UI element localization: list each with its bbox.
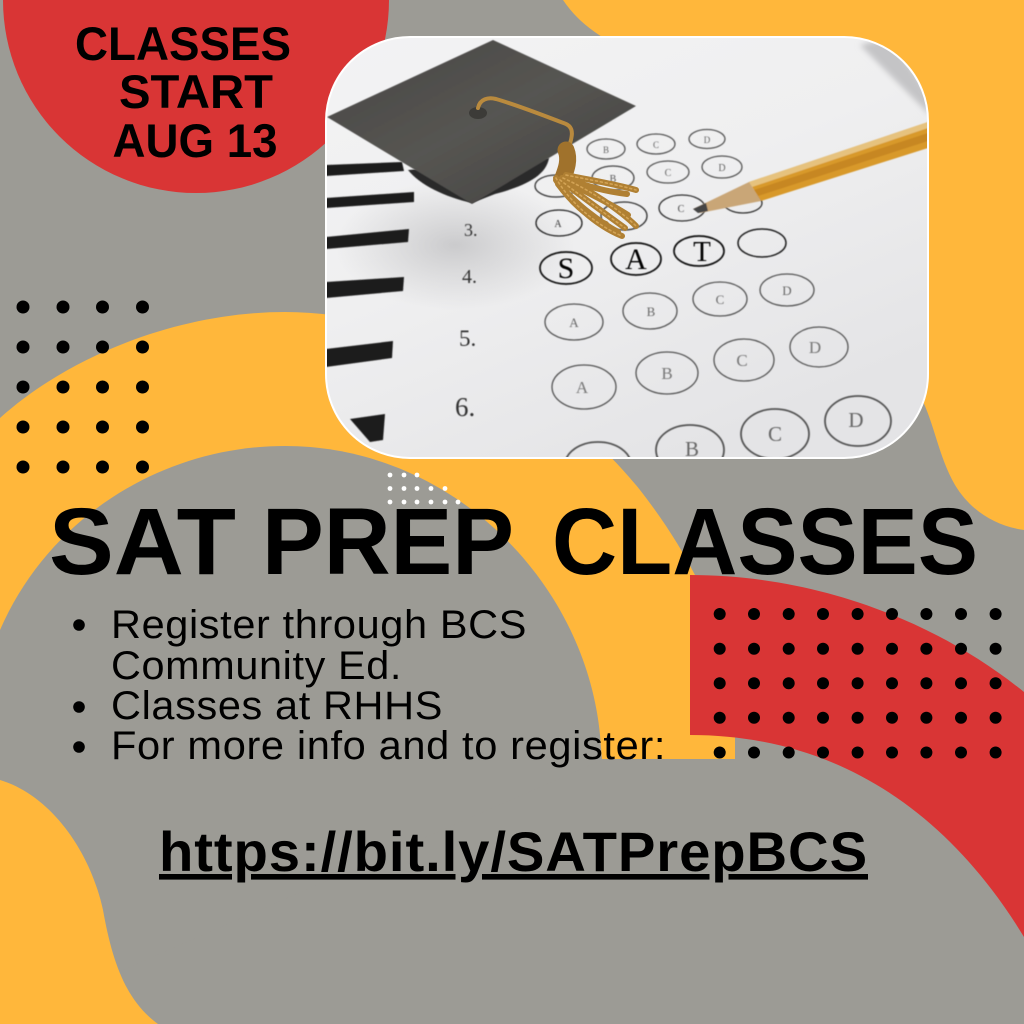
bubble letters: T: [693, 236, 711, 268]
timing bars: [326, 162, 414, 442]
badge text: AUG 13: [112, 114, 278, 167]
bubble letters: C: [768, 422, 782, 446]
bubble letters: A: [569, 315, 579, 330]
dot grid: right black dots: [714, 608, 1002, 758]
pencil: [693, 122, 928, 213]
background shape: red arc: [690, 575, 1024, 937]
bullet list: Community Ed.: [111, 644, 402, 688]
bubble letters: D: [704, 135, 711, 145]
bubble letters: A: [625, 243, 647, 276]
cap shadow on paper: [364, 196, 546, 294]
bullet list: [73, 603, 666, 768]
bubble letters: B: [603, 145, 609, 155]
bubble letters: C: [678, 204, 685, 215]
bubble letters: D: [782, 283, 792, 298]
background shape: central yellow wave: [0, 312, 735, 759]
registration link: https://bit.ly/SATPrepBCS: [159, 820, 868, 883]
bubble letters: B: [647, 304, 656, 319]
background shape: bottom left yellow: [0, 780, 158, 1024]
badge text: CLASSES: [75, 17, 291, 70]
bullet list: For more info and to register:: [111, 724, 666, 768]
question numbers: 5.: [459, 326, 476, 351]
dot grid: left black dots: [16, 300, 149, 474]
red circle badge: [3, 0, 389, 193]
bubble letters: C: [716, 292, 724, 307]
question numbers: [455, 220, 478, 422]
bullet list: Register through BCS: [111, 603, 527, 647]
bubble letters: C: [736, 351, 748, 370]
title: CLASSES: [552, 489, 978, 595]
bubble letters: A: [554, 219, 562, 230]
bubble letters: S: [558, 252, 574, 285]
bubble letters: D: [809, 338, 821, 357]
tassel: [478, 98, 636, 236]
title: SAT: [49, 489, 236, 595]
graduation cap: [327, 40, 636, 204]
background shape: top right yellow: [563, 0, 1024, 530]
question numbers: 6.: [455, 392, 475, 422]
bubble letters: C: [653, 140, 659, 150]
title: [49, 489, 978, 595]
bubble letters: D: [848, 408, 864, 432]
bubble letters: D: [718, 163, 726, 174]
bubble letters: C: [665, 168, 672, 179]
bubble letters: B: [610, 174, 617, 185]
bubble letters: B: [661, 364, 673, 383]
question numbers: 3.: [464, 220, 478, 240]
bubble letters: B: [685, 437, 699, 461]
badge text: START: [119, 65, 273, 118]
bubble letters: A: [576, 378, 589, 397]
badge text: [75, 17, 291, 167]
bubble letters: [554, 135, 864, 461]
sheet corner texture: [860, 41, 926, 114]
background shape: grey blob: [0, 446, 602, 1024]
bullet list: Classes at RHHS: [111, 684, 443, 728]
photo: SAT answer sheet with graduation cap and pencil: [326, 37, 930, 488]
title: PREP: [262, 489, 514, 595]
question numbers: 4.: [462, 266, 477, 288]
dot grid: small white dots: [388, 473, 460, 504]
answer bubbles: [535, 130, 891, 488]
